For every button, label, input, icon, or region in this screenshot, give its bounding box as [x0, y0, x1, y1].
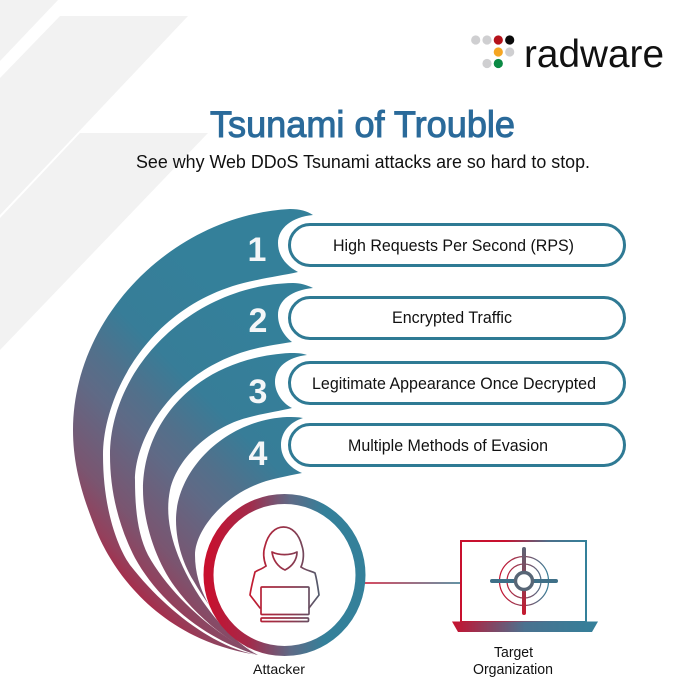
target crosshair	[492, 549, 556, 613]
pill 3	[290, 362, 624, 404]
step numbers	[248, 231, 268, 473]
connector line	[365, 582, 461, 584]
pill 1: High Requests Per Second (RPS)	[333, 237, 574, 255]
wave band 2	[110, 283, 313, 655]
step numbers: 3	[249, 373, 267, 411]
logo: radware: radware	[524, 33, 664, 76]
pill 4	[290, 424, 624, 466]
attacker ring	[208, 499, 360, 651]
target organization label: Target	[494, 645, 533, 661]
pill 1	[290, 224, 624, 266]
step numbers: 1	[248, 231, 266, 269]
pill 2: Encrypted Traffic	[392, 309, 512, 327]
step numbers: 2	[249, 302, 267, 340]
pill 3: Legitimate Appearance Once Decrypted	[312, 375, 596, 393]
target organization label: Organization	[473, 662, 553, 678]
wave band 3	[143, 353, 307, 655]
wave band 1	[73, 209, 313, 655]
target organization label	[473, 645, 553, 678]
subtitle: See why Web DDoS Tsunami attacks are so hard to stop.	[136, 151, 590, 172]
background decorative chevrons	[0, 0, 208, 350]
attacker label: Attacker	[253, 661, 305, 677]
step numbers: 4	[249, 435, 268, 473]
title: Tsunami of Trouble	[210, 104, 515, 145]
pill 2	[290, 298, 624, 338]
icon: hooded hacker with laptop	[250, 527, 319, 622]
icon: target laptop	[452, 541, 598, 632]
pill 4: Multiple Methods of Evasion	[348, 437, 548, 455]
wave band 4	[176, 417, 303, 655]
